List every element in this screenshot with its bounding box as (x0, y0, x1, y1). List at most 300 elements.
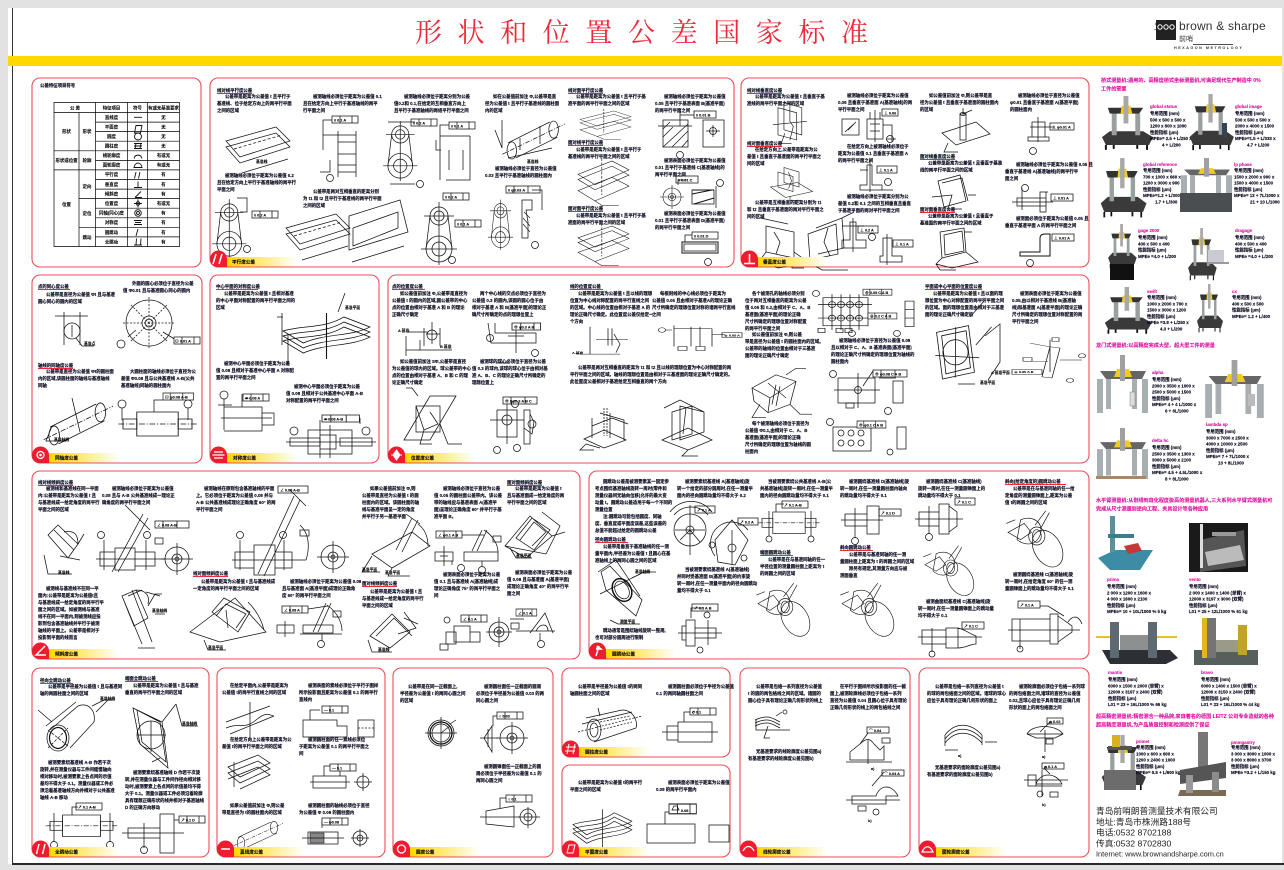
diagram: toothed wheel: ◎ 0.01 A (175, 338, 191, 344)
text block: 与基准线成一给定角度的两平行平 (38, 599, 104, 606)
diagram (773, 103, 807, 143)
text block: 为公差值 Φ 0.08 的圆柱面内 (299, 809, 355, 816)
machine: lambda sp: 性能指标 (μm) (1206, 447, 1235, 454)
diagram: ↗ 0.1 A-B (784, 502, 802, 508)
diagram: ⊥ 0.01 A (1054, 236, 1070, 240)
text block: 正确几何形状的线上的两包络线之间 (830, 704, 901, 711)
symbols table: 直线度 (105, 114, 119, 121)
diagram (830, 370, 907, 414)
text block: 的两平行平面之间 (745, 325, 781, 332)
panel: symmetry (210, 275, 379, 463)
diagram: — φ0.08 (324, 820, 339, 824)
badge (589, 642, 676, 659)
diagram (277, 603, 342, 648)
machine: gage 2000: 专用范围 (mm) (1138, 235, 1168, 240)
symbols table: 全跳动 (105, 238, 119, 246)
panel: parallelism (210, 78, 734, 267)
badge (32, 840, 119, 857)
machine: alpha: 性能指标 (μm) (1152, 395, 1181, 402)
machine: dragage: 性能指标 (μm) (1235, 247, 1264, 254)
text block: 差值 t 且垂直于基准面的两平行平面之 (747, 153, 822, 160)
machine: bravo: 专用范围 (mm) (1201, 677, 1231, 682)
text block: 间的区域 (747, 213, 765, 220)
text block: 公差带是包络一系列直径为公差值 t (935, 684, 1004, 689)
label: datum line: 基准线 (256, 159, 268, 164)
text block: 公差带是距离为公差值 t 且垂直于基 (755, 94, 825, 99)
text block: 被测线和基准线在同一平面 (46, 486, 99, 491)
badge: parallelism: 平行度公差 (232, 258, 255, 266)
text block: 当被测要素绕基准线 A(基准轴线) (685, 567, 749, 572)
machine: cx: 性能指标 (μm) (1232, 307, 1261, 314)
machine: Ip phase: 21 + 10 L/1000 (1250, 200, 1280, 204)
diagram: cone: ○ 0.1 (508, 798, 517, 802)
heading: 面对面垂直度公差 (920, 206, 956, 213)
text block: 两同心圆之间 (476, 777, 503, 784)
machine: primet: 性能指标 (μm) (1136, 763, 1165, 770)
symbols table: 有 (161, 219, 166, 225)
diagram: profile b (846, 770, 904, 823)
machine: global image: global image (1235, 104, 1262, 109)
text block: 被测表面必须位于距离为公差值 (664, 158, 725, 163)
text block: D 的正确方向移动 (125, 804, 161, 811)
diagram (826, 418, 906, 455)
machine: global image: 500 x 500 x 500 x (1235, 117, 1271, 122)
machine: global reference: 性能指标 (μm) (1143, 186, 1172, 193)
diagram: block: 0.08 (681, 809, 688, 813)
text block: 被测轮廓面必须位于包络一系列球 (1019, 684, 1085, 689)
diagram (362, 514, 430, 576)
text block: 公差带是距离为公差值 t 且以面的理 (933, 291, 1003, 296)
text block: 被测轴线必须位于距离为公差值 0.05 且 (1016, 162, 1093, 167)
diagram: double slotted block (286, 415, 376, 458)
text block: 周必须位于半径差为公差值 0.1 的 (476, 770, 542, 777)
machine: primet: 1200 x 2400 x 1000 (1136, 758, 1176, 763)
symbols table: 定向 (83, 183, 92, 190)
text block: 基准线、位于给定方向上的两平行平面 (217, 100, 292, 107)
text block: 0.05 且平行于基准表面 B(基准平面) (655, 100, 725, 107)
diagram (1008, 601, 1082, 652)
text block: 与基准线成一给定角度的两平行 (362, 595, 424, 602)
badge: 圆度公差 (416, 848, 435, 856)
text block: 量圆柱面上距离为 t 的两圆之间的区域 (840, 558, 915, 565)
diagram: profile a (846, 727, 892, 771)
machine: global status: 4 + L/200 (1162, 142, 1181, 148)
machine: prima: prima (1107, 577, 1120, 582)
text block: 无基准要求的线轮廓度公差见图a) (756, 749, 821, 754)
heading: 面对面倾斜度公差 (507, 479, 543, 486)
diagram (932, 175, 976, 209)
diagram (226, 702, 274, 738)
diagram (918, 622, 984, 657)
text block: 准 A、B、C 的理论正确尺寸所确定的 (472, 372, 546, 379)
machine: lambda sp: 专用范围 (mm) (1206, 429, 1236, 434)
diagrams: ⊥ 0.2 A (860, 228, 874, 232)
machine: gage 2000: gage 2000 (1138, 228, 1160, 233)
text block: 想位置为中心对称配置的两平行平面之间 (925, 297, 1005, 304)
diagram (486, 323, 541, 363)
text block: 差值 t的两平行平面之间的区域 (222, 743, 282, 750)
text block: 公差带是直径为公差值 Φt 且与基准 (46, 292, 115, 297)
text block: 公差带是与基准同轴的任一测 (849, 552, 906, 557)
diagram: ↗ 0.1 C (964, 624, 978, 628)
diagram (303, 706, 374, 737)
text block: 值 0.3 的球内,该球的球心位于由相对基 (472, 365, 548, 372)
machine: mantis: L01 = 23 + 16L/1000 % 66 kg (1108, 702, 1167, 707)
text block: 内的区域,该圆柱面的轴线与基准轴线 (38, 375, 110, 382)
contact block: Internet: www.brownandsharpe.com.cn (1096, 850, 1224, 858)
text block: 半径位置的测量圆柱面上距离为 t (760, 563, 825, 570)
symbols table: 无 (161, 124, 166, 130)
text block: 公差带是在同一正截面上, (408, 684, 458, 689)
diagram: hole pattern (812, 289, 914, 336)
diagram: 基准轴线 (635, 569, 650, 574)
diagram: rod: // 0.2 A (413, 122, 425, 126)
text block: 平行平面之间的区域 (507, 499, 547, 506)
text block: 平行平面之间 (838, 106, 865, 113)
panel: tolerance symbols table (32, 78, 201, 267)
text block: 于距离为公差值 0.1 的两平行平面之 (299, 743, 370, 750)
diagram: cone (480, 795, 540, 828)
text block: 被测表面的素线必须位于平行于图样 (308, 683, 378, 688)
text block: 被测轴线必须位于距离分别为公差 (404, 94, 470, 99)
text block: 并同时受基准面 B(基准平面)的约束旋 (677, 573, 751, 580)
machine: gage 2000: MPEe =4.0 + L/200 (1138, 254, 1177, 259)
diagram: rod and section (488, 186, 542, 250)
machine: swift: 1500 x 3000 x 1200 (1147, 308, 1187, 313)
text block: 间 (299, 750, 304, 757)
diagram (770, 168, 812, 200)
text block: 于基准平面的两对平行平面之间 (838, 207, 900, 214)
diagram: shaft (662, 708, 718, 742)
diagram: surface a (1027, 718, 1063, 759)
text block: 注:圆跳动可能包括圆度、同轴 (603, 514, 662, 519)
text block: 位于两对互相垂直的距离为公差 (745, 297, 807, 304)
diagram: ⊕ φ0.08 C A B (875, 372, 901, 376)
text block: 除另有规定,其测量方向应与被 (849, 565, 908, 572)
text block: 公差带是直径为公差值 t 的圆 (362, 492, 419, 499)
text block: 的区域 (400, 697, 414, 704)
diagram (670, 501, 758, 565)
text block: 公差带是距离为公差值 t 且平行于 (576, 147, 641, 152)
machine: global reference: 1200 x 3000 x 900 (1143, 181, 1180, 186)
diagram: profile a: a) (871, 767, 875, 771)
machine: cx (1197, 284, 1271, 332)
diagram: concentric circles (425, 717, 457, 749)
symbols table: 有 (161, 190, 166, 196)
diagram (842, 109, 898, 142)
text block: 理论正确尺寸确定。此位置度公差仅给定一 (570, 311, 654, 318)
text block: 平面之间的区域 (570, 786, 601, 793)
text block: 垂直于基准平面 A 的两平行平面之间 (1005, 222, 1077, 229)
text block: 被测圆柱面的任一素线必须位 (308, 737, 365, 742)
diagram: profile a: ⌒ 0.04 (869, 729, 882, 733)
diagram: planes (580, 109, 631, 139)
badge (210, 446, 297, 463)
badge: 直线度公差 (240, 848, 263, 856)
intro: ultra high precision CMMs: 超高精度测量机,为产品质量控制和检测提供了保证 (1096, 722, 1209, 728)
text block: 准平面的两平行平面之间的区域 (568, 100, 630, 107)
machine: global image: 专用范围 (mm) (1235, 111, 1265, 116)
machine: lambda sp: 13 + 8L/1000 (1218, 460, 1245, 466)
diagram: surface a: ⌓ 0.02 (1049, 720, 1060, 724)
symbols table: 有 (161, 229, 166, 235)
diagram: surface (945, 725, 997, 758)
machine: lambda sp: 4000 x 10000 x 2500 (1206, 442, 1248, 447)
diagram (440, 615, 512, 650)
text block: 确角度的两平行平面之间 (102, 499, 151, 506)
text block: 准轴线上的两同心圆之间的区域 (595, 557, 657, 564)
heading: 平面或中心平面的位置度公差 (925, 283, 983, 290)
diagram: ↗ 0.1 C (957, 500, 971, 504)
badge (562, 740, 649, 757)
diagram: ∠ 0.1 A (463, 618, 477, 622)
text block: 径为公差值 t 且平行于基准线的圆柱面 (485, 100, 560, 107)
diagram: ⊕ φ0.3 A B (514, 326, 535, 330)
text block: t 的圆的两包络线之间的区域。诸圆的 (748, 690, 822, 697)
diagram: hole pattern: ⊕ 0.2 C A B (870, 315, 892, 319)
text block: 被测轴线必须位于直径为公差值 (495, 166, 556, 171)
machine: global reference: 1.7 + L/300 (1155, 200, 1178, 204)
diagram: ⊕ 0.05 A B (1014, 371, 1034, 374)
text block: 在给定方向上公差带是距离为公 (230, 737, 291, 742)
text block: 转一周时,在给定角度 60° 的任一测 (1005, 578, 1073, 585)
text block: 转一周时,在任一测量圆锥面上的跳动量 (918, 605, 994, 612)
machine: bravo: L01 = 23 + 16L/1000 % 44 kg (1201, 702, 1260, 707)
machine: swift: MPEe =3.8 + L/250 x (1147, 320, 1189, 325)
symbols table (54, 102, 180, 246)
diagram (598, 560, 656, 624)
text block: 理论正确角度 75° 的两平行平面之 (434, 585, 501, 592)
text block: 被测轴线必须位于距离为公差值 (664, 94, 725, 99)
panel: surface profile (919, 668, 1089, 857)
diagram: curve (755, 710, 790, 738)
machine: vento photo (1189, 523, 1248, 614)
text block: 带是直径为公差值 t 的圆柱面内的区域。 (745, 338, 824, 345)
diagram: square: 基准轴线 (182, 721, 197, 726)
diagram: point position: A 基准 (398, 328, 409, 333)
machine: alpha (1097, 355, 1197, 414)
symbols table: 平面度 (105, 124, 119, 130)
diagram: rod (383, 119, 437, 188)
diagram (510, 609, 555, 648)
text block: 定角度的测量圆锥面上,距离为公差 (1005, 492, 1073, 499)
symbols table: 位置度 (105, 200, 119, 207)
diagram: angled hole (96, 505, 193, 575)
machine: swift: 性能指标 (μm) (1147, 313, 1176, 320)
text block: 0.03 且平行于基准轴线的圆柱面内 (485, 172, 552, 179)
diagram: double slotted block: ⌯ 0.08 A-B (323, 418, 343, 422)
text block: 被测轴线必须位于距离分别为公 (847, 194, 908, 199)
text block: 尺寸所确定的理想位置对称的诸两平行直线 (652, 304, 736, 311)
text block: 也可对部分圆周进行限制 (595, 634, 644, 641)
machine: mantis: 性能指标 (μm) (1108, 695, 1137, 702)
machine: mantis: 12000 x 3197 x 2400 (双臂) (1108, 689, 1163, 696)
diagram: hatched block: // 0.01 B (696, 114, 711, 118)
machine: mantis: mantis (1108, 670, 1123, 675)
machine: delta: 专用范围 (mm) (1152, 445, 1182, 450)
text block: 尺寸所确定的理想位置为轴线的圆 (745, 441, 811, 448)
machine: alpha: 6 + 6L/1000 (1165, 408, 1189, 414)
diagram: point position (398, 322, 452, 356)
heading (38, 283, 70, 290)
heading (125, 675, 158, 682)
machine: Ip phase: 1500 x 2000 x 900 x (1234, 174, 1275, 179)
text block: 面内的径向圆跳动量均不得大于 0.1 (760, 492, 829, 499)
machine: dragage (1188, 228, 1274, 280)
diagram: ∠ 0.08 A (284, 608, 300, 612)
text block: 量平面内,半径差为公差值 t 且圆心在基 (595, 550, 671, 557)
machine: global status: 500 x 500 x 500 x (1150, 117, 1186, 122)
panel: straightness (217, 668, 385, 857)
diagram: hatched block (658, 111, 724, 158)
heading: 线对线垂直度公差 (747, 87, 783, 94)
diagram (678, 604, 722, 653)
symbols table: 形状 (83, 128, 92, 135)
text block: 区域 (216, 304, 225, 310)
diagram (302, 818, 369, 847)
machine: swift: 4.3 + L/200 (1160, 326, 1183, 332)
diagram: point position: B 基准 (440, 344, 452, 349)
machine: global status: MPEe= 2.5 + L/250 x (1150, 136, 1192, 141)
diagram: symmetric planes (277, 293, 370, 365)
machine: global image: 4.7 + L/200 (1247, 142, 1270, 148)
text block: 面内:公差带是距离为公差值t且 (38, 592, 99, 599)
text block: 线)和基准面 A(基准平面)的理论正确 (1012, 304, 1083, 311)
text block: 公差带是距离为公差值 t 且以线的理想 (578, 291, 652, 296)
diagram: profile b: b) (868, 819, 872, 823)
text block: 准面的两平行平面之间的区域 (568, 219, 626, 226)
symbols table: 无 (161, 115, 166, 121)
symbols table: 特征项目 (103, 104, 120, 112)
machine: vento photo: vento (1189, 577, 1201, 582)
machine: primet: 1000 x 600 x 600 x (1136, 751, 1174, 756)
text block: 面之间 (1005, 175, 1019, 182)
text block: 量圆锥面上的跳动量均不得大于 0.1 (1005, 585, 1074, 592)
badge: 面轮廓度公差 (942, 848, 970, 856)
diagram: rod lower (421, 193, 481, 265)
diagram: 基准平面 (385, 570, 400, 575)
symbols table: 圆柱度 (105, 142, 119, 150)
diagram: cylinder tolerance zone: 基准线 (527, 159, 539, 164)
text block: 公差带是距离为公差值 t 且平行于 (225, 94, 290, 99)
intro: bridge CMMs: 工件的需要 (1101, 86, 1126, 92)
symbols table: 平行度 (105, 171, 119, 178)
heading: plane to plane: 面对面平行度公差 (568, 205, 604, 212)
machine: prima: 2 000 x 1200 x 1600 x (1107, 590, 1152, 595)
text block: 无基准要求的面轮廓度公差见图a) (935, 765, 1000, 770)
text block: 值 Φ0.01 且与基准圆心同心的圆内 (123, 287, 191, 294)
text block: 尺寸所确定的理想位置对称配置 (745, 318, 807, 325)
text block: 间的区域 (747, 160, 765, 167)
text block: 被测轴线必须位于距离为公差值 0.1 (313, 94, 382, 99)
diagram: toothed wheel (117, 297, 200, 349)
machine: delta: 3000 x 5000 x 2100 (1152, 458, 1192, 463)
intro: horizontal arm CMMs: 水平臂测量机:从划线到自化程度极高的测量机器人,三大系列水平臂式测量机可 (1096, 498, 1272, 504)
heading: line to plane: 线对面平行度公差 (568, 87, 604, 94)
text block: 线的两平行平面之间的区域 (920, 166, 973, 174)
diagram (505, 512, 565, 558)
diagram: wheel and section (660, 176, 724, 209)
symbols table: 有或无基准要求 (148, 104, 179, 112)
text block: 且在给定方向上平行于基准轴线的两平行 (217, 179, 297, 186)
diagram: ↗ 0.1 A (697, 508, 711, 512)
machine: prima (1098, 516, 1167, 614)
diagram (1012, 184, 1073, 212)
machine: bravo: 12000 x 3150 x 2400 (双臂) (1201, 689, 1256, 696)
text block: 被测轴线必须位于距离为公差值 0.08 (290, 579, 361, 584)
text block: 位置为中心线对称配置的两平行直线之间 (570, 297, 650, 304)
diagram: coaxial cylinder (44, 398, 113, 445)
diagram: profile b: ⌒ 0.04 A (884, 772, 900, 776)
machine: pmm gantry (1178, 732, 1276, 796)
panel: perpendicularity (741, 78, 1093, 270)
badge (562, 840, 649, 857)
text block: 被测表面必须位于距离为公差值 (668, 780, 729, 785)
diagram (1028, 117, 1074, 154)
text block: 此位置度公差相对于基准给定互相垂直的两个方向 (570, 378, 667, 385)
machine: global status: global status (1150, 104, 1178, 109)
text block: 被测圆绕基准线 C(基准轴线)旋 (1013, 572, 1073, 577)
machine: gage 2000: 性能指标 (μm) (1138, 247, 1167, 254)
diagram (1006, 511, 1069, 572)
diagram: stepped shaft (118, 393, 197, 436)
text block: 基准轴线)同轴的圆柱面内 (121, 382, 171, 389)
text block: 有基准要求的线轮廓度公差见图b) (748, 755, 814, 762)
heading: 点的位置度公差 (392, 283, 423, 290)
text block: 基准面(基准平面)的理论正确 (745, 311, 801, 318)
machine: pmm gantry: 3 000 x 8000 x 3700 (1231, 758, 1272, 763)
machine: Ip phase (1180, 158, 1280, 212)
text block: 被测轴线必须位于直径为公差 (443, 486, 500, 491)
panel: flatness (562, 765, 730, 857)
diagram: shaft: ⌭ 0.1 (691, 710, 701, 714)
diagram: surface b (1024, 763, 1068, 807)
text block: 圆心同心的圆内的区域 (38, 298, 83, 305)
text block: 平行平面之间 (1012, 318, 1039, 325)
symbols table: 线轮廓度 (103, 152, 121, 159)
diagram: ↗ 0.2 A (740, 520, 754, 524)
text block: 每根刻线的中心线必须位于距离为 (660, 291, 726, 296)
text block: 基准面(基准平面)的理论正确 (745, 434, 801, 441)
diagram: slot plate: // 0.01 D (694, 234, 709, 238)
symbols table: 公 差 (70, 104, 81, 112)
text block: 如公差值前加注 Φ,则公差带是直 (929, 93, 992, 98)
text block: 柱面内 (745, 448, 759, 455)
diagram: rod lower: // 0.1 A (457, 222, 469, 226)
machine: mantis (1096, 622, 1178, 707)
heading: 轴线的同轴度公差 (38, 362, 74, 369)
panel: angularity (32, 471, 580, 659)
diagram: 60 degree (232, 486, 349, 576)
text block: 被测曲面绕基准线 C(基准轴线)旋 (926, 599, 990, 604)
text block: 内:公差带是距离为公差值 t 且 (38, 492, 97, 499)
diagram: wheel and section: // 0.01 C (678, 178, 693, 182)
text block: 测量仪器间无轴向位移)允许的最大变 (595, 492, 667, 499)
text block: 测量位置 (595, 506, 613, 513)
machine: vento photo: 12000 x 3197 x 3000 (双臂) (1189, 596, 1244, 603)
logo: brown & sharpe: HEXAGON METROLOGY (1174, 46, 1243, 50)
text block: 跳动量均不得大于 0.1 (918, 492, 961, 499)
machine: prima: MPEe= 10 + 10L/1000 % 5 kg (1107, 609, 1167, 614)
text block: 如果公差值前加注 Φ,则 (370, 486, 416, 491)
diagram: 测量平面 (620, 619, 635, 624)
panel: cylindricity (562, 668, 734, 757)
symbols table: 垂直度 (105, 181, 119, 188)
machine: delta: delta hc (1152, 438, 1169, 443)
text block: 跳动通常是围绕轴线旋转一整周, (603, 628, 666, 633)
diagram: stepped shaft: ◎ φ0.08 A-B (165, 394, 188, 400)
machine: Ip phase: 1500 x 4000 x 1500 (1234, 181, 1274, 186)
